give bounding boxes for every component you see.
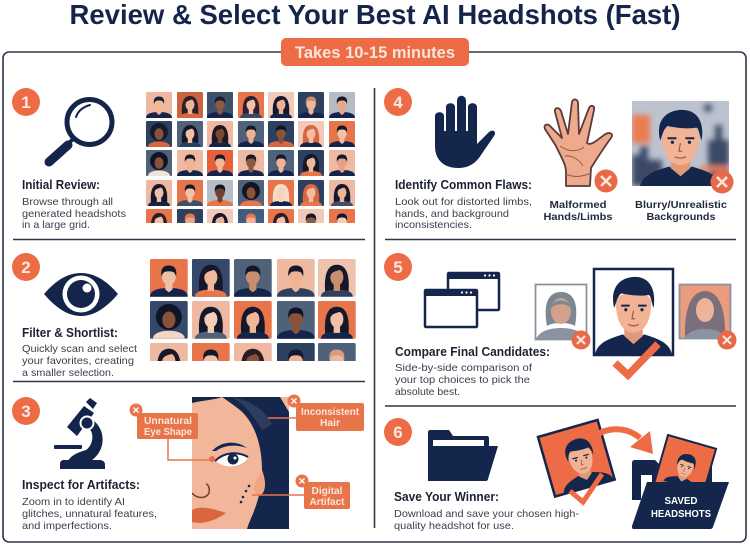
label: blurry backgrounds <box>635 199 727 223</box>
icon: x badge on portrait <box>710 170 734 194</box>
zoomed face illustration <box>192 397 289 529</box>
description: Browse through all <box>22 196 113 208</box>
callout: digital artifact: Digital <box>312 486 343 497</box>
description: Quickly scan and select <box>22 343 137 355</box>
badge 4: 4 <box>393 93 403 112</box>
illustration: malformed hand <box>545 99 612 186</box>
shortlist grid <box>150 259 356 361</box>
heading: Save Your Winner: <box>394 490 499 504</box>
icon: check mark <box>615 344 658 375</box>
icon: eye <box>44 273 118 316</box>
callout: digital artifact: Artifact <box>310 497 345 508</box>
description: inconsistencies. <box>395 219 472 231</box>
badge 3: 3 <box>21 402 31 421</box>
description: glitches, unnatural features, <box>22 508 157 520</box>
callout: digital artifact <box>296 474 350 509</box>
callout: unnatural eye shape <box>130 404 198 439</box>
badge 2 <box>12 253 40 281</box>
heading: Compare Final Candidates: <box>395 345 550 359</box>
description: your favorites, creating <box>22 355 134 367</box>
badge 5: 5 <box>393 258 403 277</box>
callout: unnatural eye shape: Unnatural <box>144 416 192 427</box>
description <box>395 196 532 231</box>
icon: magnifying glass <box>49 100 112 162</box>
description <box>22 496 157 532</box>
heading: Filter & Shortlist: <box>22 326 118 340</box>
badge 1: 1 <box>21 93 31 112</box>
description: and imperfections. <box>22 520 112 532</box>
description: generated headshots <box>22 208 126 220</box>
panel: step 2 filter and shortlist <box>12 253 356 381</box>
heading: Identify Common Flaws: <box>395 178 532 192</box>
description: quality headshot for use. <box>394 520 514 532</box>
heading: Inspect for Artifacts: <box>22 478 140 492</box>
icon: x badge left <box>572 330 590 350</box>
panel: step 3 inspect for artifacts <box>12 394 364 532</box>
selected portrait <box>594 269 673 355</box>
candidate portrait right <box>680 284 730 338</box>
description <box>22 196 126 231</box>
callout: inconsistent hair <box>288 394 364 431</box>
badge 3 <box>12 397 40 425</box>
tilted winner photo <box>538 420 615 497</box>
photo in folder <box>654 435 716 499</box>
badge 5 <box>384 253 412 281</box>
panel: step 1 initial review <box>12 88 355 235</box>
icon: x badge on hand <box>594 170 618 192</box>
callout: unnatural eye shape: Eye Shape <box>144 427 192 438</box>
description: Download and save your chosen high- <box>394 508 580 520</box>
callout: inconsistent hair: Hair <box>320 418 340 429</box>
icon: folder <box>428 430 498 481</box>
badge 6 <box>384 418 412 446</box>
panel: step 4 identify common flaws <box>384 88 734 231</box>
callout: inconsistent hair: Inconsistent <box>301 407 360 418</box>
description: absolute best. <box>395 386 460 398</box>
label: malformed hands <box>544 199 613 223</box>
label: malformed hands: Hands/Limbs <box>544 211 613 223</box>
panel: step 6 save your winner <box>384 418 729 532</box>
callout lines <box>168 418 304 495</box>
badge 4 <box>384 88 412 116</box>
description <box>394 508 580 532</box>
saved headshots folder: HEADSHOTS <box>651 509 711 520</box>
heading: Initial Review: <box>22 178 100 192</box>
label: malformed hands: Malformed <box>550 199 606 211</box>
description: a smaller selection. <box>22 367 114 379</box>
description: hands, and background <box>395 208 509 220</box>
headshot grid <box>146 92 355 235</box>
time badge: Takes 10-15 minutes <box>295 43 455 62</box>
saved headshots folder: SAVED <box>664 496 698 507</box>
label: blurry backgrounds: Backgrounds <box>646 211 716 223</box>
icon: microscope <box>54 398 105 469</box>
icon: check on photo <box>570 474 602 502</box>
description: Side-by-side comparison of <box>395 362 532 374</box>
icon: x badge right <box>718 330 736 350</box>
time badge <box>281 38 469 66</box>
description <box>395 362 532 398</box>
badge 1 <box>12 88 40 116</box>
arrow to folder <box>594 429 653 454</box>
label: blurry backgrounds: Blurry/Unrealistic <box>635 199 727 211</box>
description: Look out for distorted limbs, <box>395 196 532 208</box>
badge 6: 6 <box>393 423 403 442</box>
icon: browser windows <box>425 272 499 327</box>
description: Zoom in to identify AI <box>22 496 125 508</box>
description <box>22 343 137 379</box>
description: your top choices to pick the <box>395 374 530 386</box>
illustration: blurry background portrait <box>632 101 729 186</box>
candidate portrait left <box>536 284 586 340</box>
panel: step 5 compare final candidates <box>384 253 736 398</box>
icon: raised hand <box>435 96 495 168</box>
description: in a large grid. <box>22 219 90 231</box>
saved headshots folder <box>632 435 729 529</box>
badge 2: 2 <box>21 258 31 277</box>
